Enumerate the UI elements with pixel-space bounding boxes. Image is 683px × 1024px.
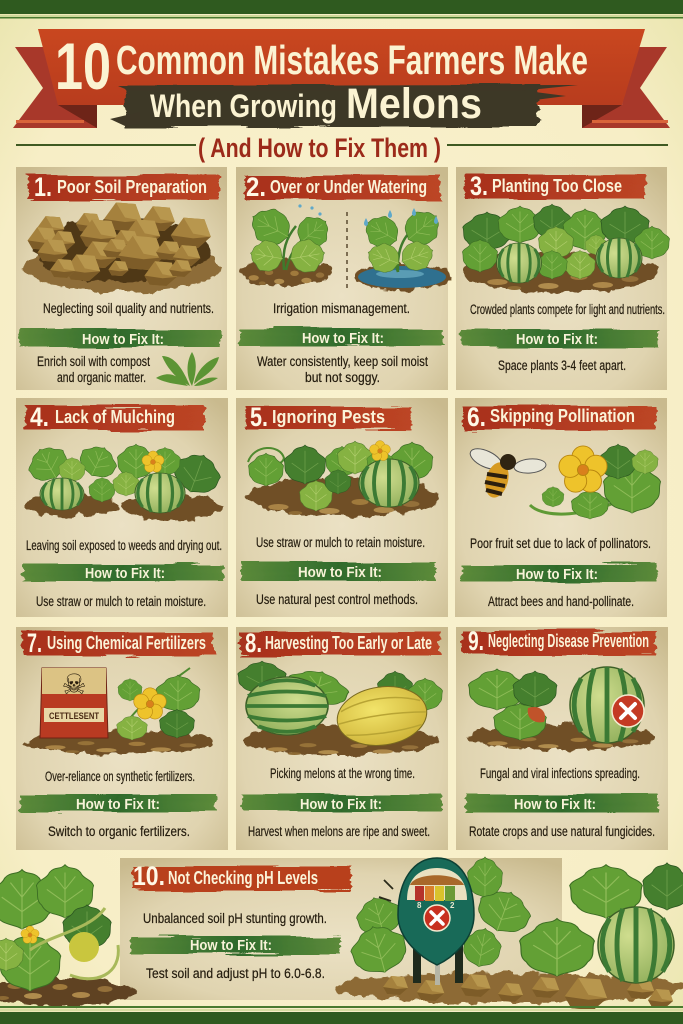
icon: fertilizer bag: ☠ bbox=[61, 668, 87, 701]
title: line 2 bbox=[150, 80, 482, 128]
fix text: Enrich soil with compost bbox=[37, 354, 150, 369]
header: Lack of Mulching bbox=[55, 407, 175, 427]
problem text: Neglecting soil quality and nutrients. bbox=[43, 301, 214, 316]
card bbox=[456, 627, 668, 850]
illustration: fertilizer bag and plant bbox=[26, 668, 214, 754]
header: Not Checking pH Levels bbox=[168, 868, 318, 888]
card bbox=[16, 627, 228, 850]
illustration: right melon and leaves bbox=[520, 863, 683, 983]
illustration: crowded melon plants bbox=[462, 204, 670, 292]
panel 8: harvesting too early or late bbox=[236, 627, 448, 850]
subtitle with rules: ( And How to Fix Them ) bbox=[198, 133, 441, 163]
fix text bbox=[257, 354, 428, 385]
ribbon folds bbox=[58, 105, 622, 128]
header: 3. bbox=[470, 171, 488, 201]
fix bar bbox=[240, 328, 443, 347]
fix bar bbox=[241, 562, 435, 581]
header: 5. bbox=[250, 402, 268, 432]
bottom soil strip bbox=[0, 973, 683, 1010]
illustration: cracked soil clods bbox=[24, 202, 220, 292]
fix text: Water consistently, keep soil moist bbox=[257, 354, 428, 369]
panel 1: poor soil preparation bbox=[16, 167, 227, 390]
header: Poor Soil Preparation bbox=[57, 177, 207, 197]
fix bar bbox=[461, 329, 658, 348]
header: Using Chemical Fertilizers bbox=[47, 633, 206, 653]
dark brush banner bbox=[110, 85, 578, 127]
fix bar: How to Fix It: bbox=[76, 796, 160, 813]
title: line 2: When Growing bbox=[150, 88, 337, 124]
bottom green band bbox=[0, 1006, 683, 1024]
problem text: Use straw or mulch to retain moisture. bbox=[256, 535, 425, 550]
fix text: and organic matter. bbox=[57, 370, 146, 385]
header: 4. bbox=[30, 402, 49, 432]
header bbox=[27, 172, 219, 202]
header bbox=[22, 628, 214, 658]
problem text: Unbalanced soil pH stunting growth. bbox=[143, 911, 327, 926]
fix bar: How to Fix It: bbox=[298, 564, 382, 581]
header: Ignoring Pests bbox=[272, 407, 385, 427]
illustration: diseased plant and melon bbox=[468, 667, 656, 750]
icon: pH soil meter with leaves bbox=[346, 857, 536, 985]
fix bar bbox=[19, 329, 222, 348]
card bbox=[16, 398, 228, 617]
illustration: melon with pest-bitten leaves bbox=[247, 441, 439, 517]
header: Harvesting Too Early or Late bbox=[265, 633, 432, 653]
fix text: Attract bees and hand-pollinate. bbox=[488, 594, 634, 609]
header bbox=[463, 402, 656, 432]
header bbox=[463, 626, 656, 656]
header: Skipping Pollination bbox=[490, 406, 635, 426]
illustration: dry and flooded plants bbox=[240, 201, 450, 290]
header: 6. bbox=[467, 402, 486, 432]
left ribbon tail bbox=[13, 47, 97, 128]
title: line 1 bbox=[55, 29, 588, 103]
right ribbon tail bbox=[582, 47, 670, 128]
fix bar: How to Fix It: bbox=[85, 565, 165, 582]
header: Over or Under Watering bbox=[270, 177, 427, 197]
panel 7: chemical fertilizers bbox=[16, 627, 228, 850]
fix bar: How to Fix It: bbox=[516, 331, 598, 348]
ribbon stripes bbox=[16, 120, 668, 123]
fix text bbox=[37, 354, 150, 385]
card bbox=[120, 858, 562, 1000]
header: 9. bbox=[468, 626, 484, 656]
header bbox=[465, 171, 645, 201]
card bbox=[456, 167, 667, 390]
icon: pH soil meter with leaves: 8 bbox=[417, 901, 422, 910]
icon: fertilizer bag: CETTLESENT bbox=[49, 711, 99, 722]
fix text: Use natural pest control methods. bbox=[256, 592, 418, 607]
main red banner bbox=[38, 29, 645, 105]
card bbox=[236, 627, 448, 850]
title: line 1: 10 bbox=[55, 29, 111, 103]
header bbox=[133, 861, 351, 891]
problem text: Irrigation mismanagement. bbox=[273, 301, 410, 316]
illustration: bee and flower bbox=[467, 444, 661, 519]
fix bar bbox=[242, 794, 441, 813]
fix text: Test soil and adjust pH to 6.0-6.8. bbox=[146, 966, 325, 981]
illustration: green and yellow melons bbox=[238, 661, 443, 755]
title: line 2: Melons bbox=[346, 80, 482, 128]
panel 2: over or under watering bbox=[236, 167, 450, 390]
fix text: Harvest when melons are ripe and sweet. bbox=[248, 824, 430, 839]
card bbox=[236, 398, 448, 617]
panel 5: ignoring pests bbox=[236, 398, 448, 617]
panel 9: neglecting disease prevention bbox=[456, 626, 668, 850]
problem text: Leaving soil exposed to weeds and drying out. bbox=[26, 538, 222, 553]
header: 8. bbox=[245, 628, 262, 658]
title banner bbox=[13, 29, 670, 163]
card bbox=[236, 167, 448, 390]
fix bar bbox=[23, 564, 223, 582]
header: 7. bbox=[27, 628, 42, 658]
illustration: left melon vine bbox=[0, 865, 118, 991]
top green band bbox=[0, 0, 683, 18]
header: 10. bbox=[133, 861, 165, 891]
fix text: but not soggy. bbox=[305, 370, 380, 385]
problem text: Picking melons at the wrong time. bbox=[270, 766, 415, 781]
fix bar: How to Fix It: bbox=[82, 331, 164, 348]
header bbox=[245, 172, 440, 202]
icon: fertilizer bag bbox=[40, 668, 108, 738]
fix text: Use straw or mulch to retain moisture. bbox=[36, 594, 206, 609]
icon: pH soil meter with leaves: 2 bbox=[450, 901, 455, 910]
fix bar bbox=[465, 794, 658, 813]
panel 4: lack of mulching bbox=[16, 398, 228, 617]
header: 1. bbox=[34, 172, 52, 202]
panel 3: planting too close bbox=[456, 167, 670, 390]
fix bar bbox=[21, 794, 216, 813]
panel 6: skipping pollination bbox=[455, 398, 667, 617]
fix bar: How to Fix It: bbox=[516, 566, 598, 583]
icon: herb bbox=[156, 352, 219, 386]
card bbox=[16, 167, 227, 390]
fix text: Space plants 3-4 feet apart. bbox=[498, 358, 626, 373]
fix bar: How to Fix It: bbox=[302, 330, 384, 347]
header bbox=[246, 402, 411, 432]
problem text: Over-reliance on synthetic fertilizers. bbox=[45, 769, 195, 784]
icon: red X bbox=[612, 695, 644, 727]
header: 2. bbox=[246, 172, 266, 202]
illustration: melons on bare soil bbox=[22, 440, 226, 520]
fix bar bbox=[130, 936, 340, 954]
panel 10: not checking pH levels bbox=[120, 858, 562, 1000]
fix bar: How to Fix It: bbox=[190, 937, 272, 954]
fix bar: How to Fix It: bbox=[514, 796, 596, 813]
header bbox=[240, 628, 440, 658]
fix text: Switch to organic fertilizers. bbox=[48, 824, 190, 839]
fix bar bbox=[461, 564, 657, 583]
header bbox=[25, 402, 205, 432]
header: Planting Too Close bbox=[492, 176, 622, 196]
fix bar: How to Fix It: bbox=[300, 796, 382, 813]
card bbox=[455, 398, 667, 617]
